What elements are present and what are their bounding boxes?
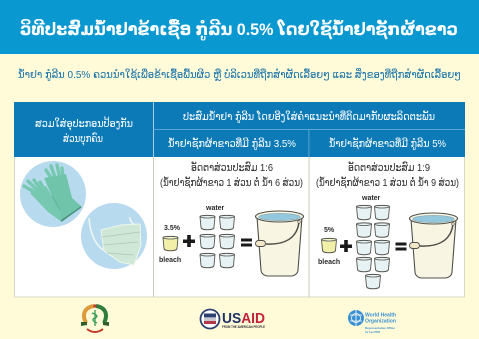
label: water: water (205, 205, 225, 212)
icon: face mask (81, 203, 147, 269)
ratio text 1:6: (ນ້ຳຢາຊັກຜ້າຂາວ 1 ສ່ວນ ຕໍ່ ນ້ຳ 6 ສ່ວນ) (160, 176, 303, 189)
label: 3.5%: 3.5% (164, 225, 181, 232)
ratio text 1:9 (316, 161, 459, 189)
icon: bucket (256, 211, 304, 276)
icon: bleach cup (322, 238, 336, 253)
icon: bucket (410, 213, 458, 278)
equals sign (241, 238, 252, 246)
plus sign (183, 235, 195, 247)
title banner: ວິທີປະສົມນ້ຳຢາຂ້າເຊື້ອ ກູໍລີນ 0.5% ໂດຍໃຊ້ນ້ຳຢາຊັກຜ້າຂາວ (20, 18, 458, 41)
panel: table (14, 102, 465, 297)
ratio text 1:9: ອັດຕາສ່ວນປະສົມ 1:9 (348, 161, 430, 174)
panel: ratio 1:6 (159, 161, 304, 276)
intro text: ນ້ຳຢາ ກູໍລີນ 0.5% ຄວນນຳໃຊ້ເພື່ອຂ້າເຊື້ອພື້ນຜິວ ຫຼື ບໍລິເວນທີ່ຖືກສຳຜັດເລື້ອຍໆ ແລະ ສິ່ງຂອງທີ່ຖືກສຳຜັດເລື້ອຍໆ (18, 68, 461, 81)
ratio text 1:6: ອັດຕາສ່ວນປະສົມ 1:6 (191, 161, 273, 174)
plus sign (340, 240, 352, 252)
logo: WHO: Representative Office (365, 326, 395, 330)
heading: bleach 5%: ນ້ຳຢາຊັກຜ້າຂາວທີ່ມີ ກູໍລີນ 5% (329, 137, 446, 150)
icon: gloves (20, 161, 86, 227)
heading: mixing instruction: ປະສົມນ້ຳຢາ ກູໍລີນ ໂດຍອີງໃສ່ຄຳແນະນຳທີ່ຕິດມາກັບຜະລິດຕະພັນ (183, 110, 435, 123)
panel: ratio 1:9 (316, 161, 459, 289)
logo: WHO: for Lao PDR (365, 330, 380, 334)
logo: Ministry of Health (81, 304, 109, 332)
heading: protective equipment: ສວມໃສ່ອຸປະກອນປ້ອງກັນ (35, 117, 133, 131)
icon: six water cups (200, 215, 234, 268)
heading: protective equipment (35, 117, 133, 146)
label: 5%: 5% (324, 227, 335, 234)
ratio text 1:6 (160, 161, 303, 189)
label: water: water (361, 195, 381, 202)
logo: WHO (348, 310, 396, 334)
heading: bleach 3.5%: ນ້ຳຢາຊັກຜ້າຂາວທີ່ມີ ກູໍລີນ 3.5% (168, 137, 296, 150)
icon: nine water cups (356, 205, 390, 289)
label: bleach: bleach (318, 259, 340, 266)
logo: USAID: FROM THE AMERICAN PEOPLE (222, 325, 265, 329)
logo: USAID (200, 310, 265, 329)
icon: bleach cup (163, 236, 178, 251)
logo: WHO: Organization (365, 318, 396, 324)
title banner (0, 0, 479, 54)
heading: protective equipment: ສ່ວນບຸກຄົນ (63, 132, 103, 146)
table header band (14, 102, 465, 157)
logo: USAID: USAID (222, 311, 265, 327)
equals sign (396, 242, 406, 250)
logo: WHO: World Health (365, 312, 396, 318)
label: bleach: bleach (159, 257, 181, 264)
